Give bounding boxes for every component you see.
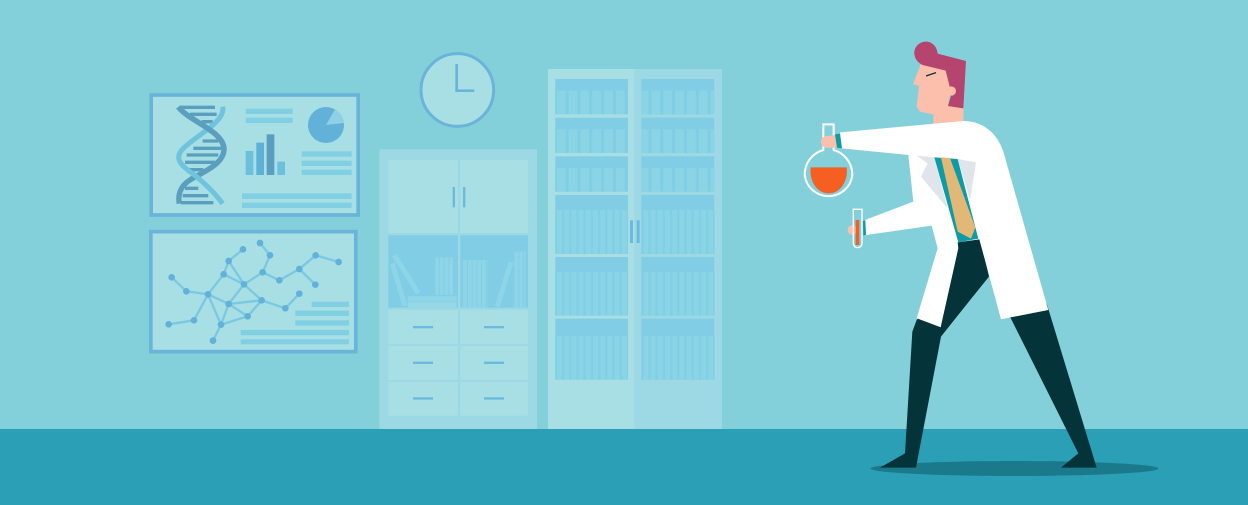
test tube hand [848,225,857,235]
ear [947,86,956,96]
upper cuff [835,134,842,148]
icon: wall clock [421,54,494,126]
upper cabinet doors [388,160,528,233]
shelf backs [555,79,714,380]
lower cuff [863,220,866,235]
shirt [934,157,978,242]
flask hand [821,135,838,148]
poster: molecular network [151,232,356,352]
bookcase handles [630,220,640,243]
flask [805,124,852,196]
panel: clock and furniture [379,54,722,429]
floor [0,429,1248,505]
pie chart [308,107,344,143]
eye [926,73,936,76]
network diagram [165,240,342,344]
drawer handles [413,326,504,400]
poster: DNA and charts [151,95,358,215]
panel: wall posters [151,95,358,352]
door handles [453,187,465,207]
floor shadow [870,461,1158,476]
hair [914,42,966,108]
low cabinet [379,149,537,429]
drawers [388,310,528,416]
necktie [941,157,975,239]
bar chart [246,134,285,175]
open shelf with books [388,235,528,308]
icon: DNA helix [178,107,224,204]
test tube [853,209,862,248]
neck and face [913,63,964,125]
upper trousers [922,237,989,337]
text lines [241,302,349,344]
scientist [805,42,1097,468]
lab coat [840,121,1048,327]
text lines [242,109,352,208]
tall bookcase [548,69,722,429]
shirt collar and lapel [917,156,976,208]
figure upper body [805,42,1048,337]
legs and shoes [880,287,1097,468]
rows of books [555,91,714,380]
